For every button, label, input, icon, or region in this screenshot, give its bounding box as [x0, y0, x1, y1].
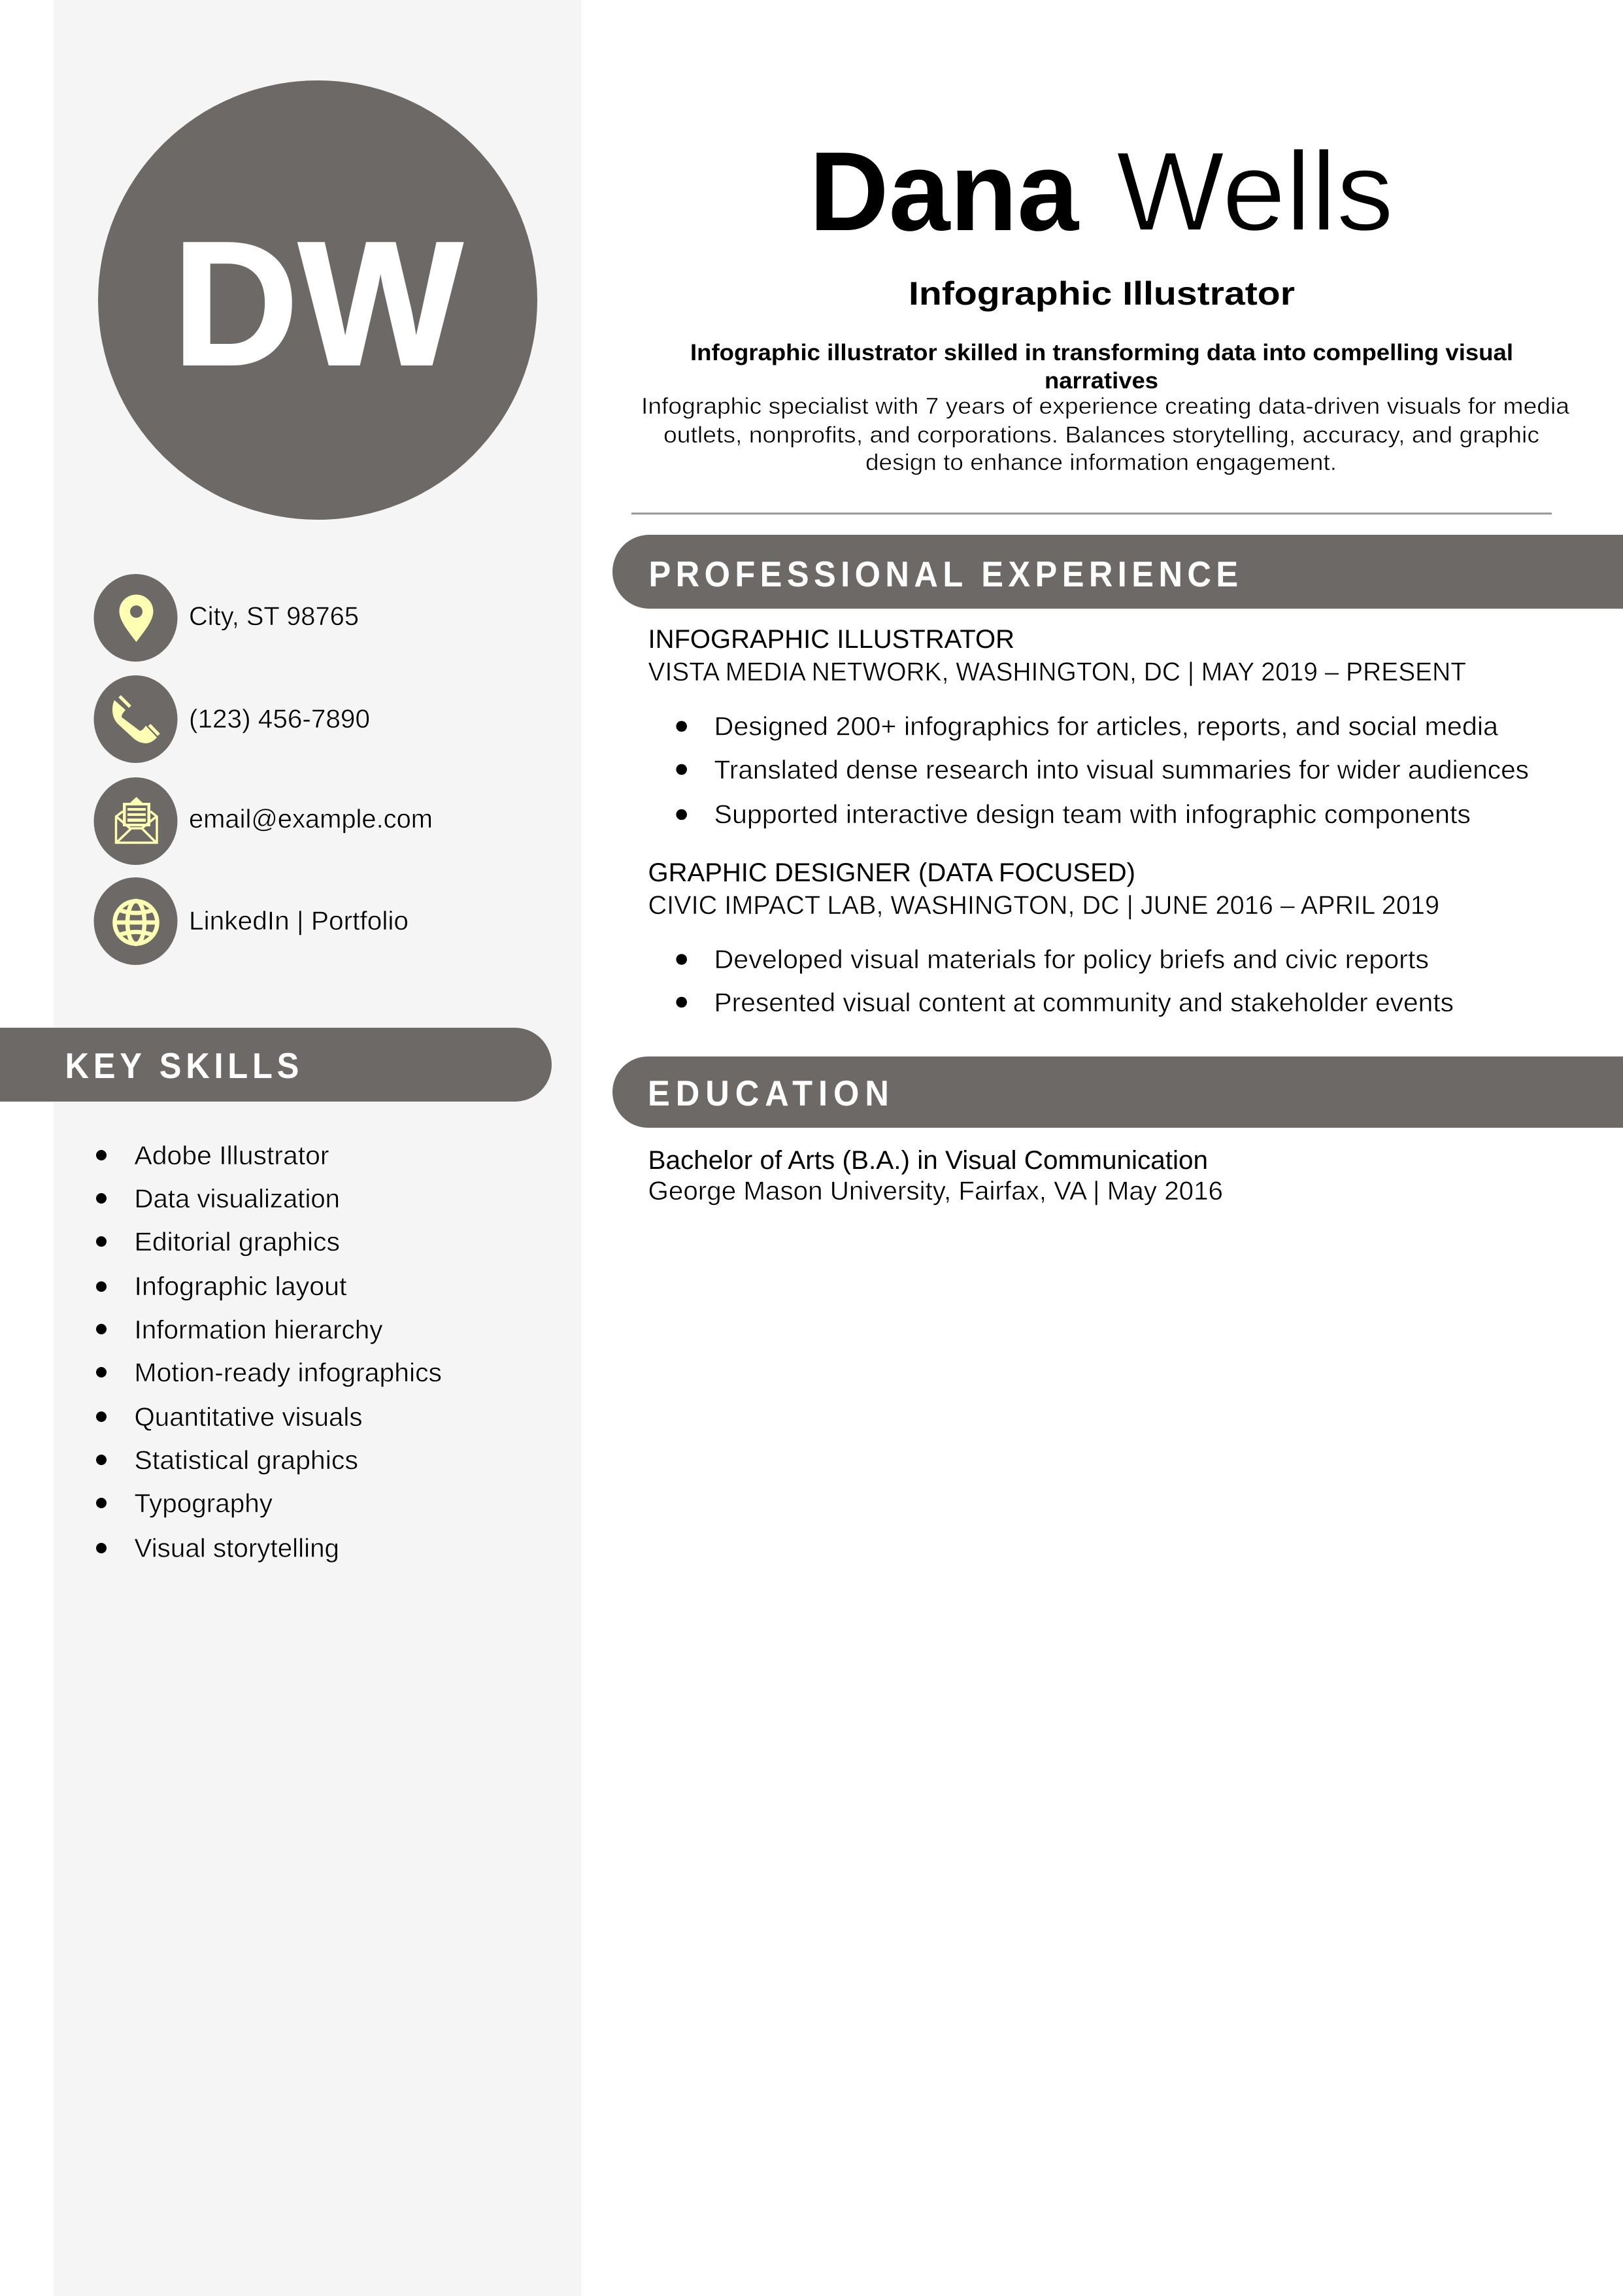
contact: links: LinkedIn | Portfolio	[189, 907, 409, 936]
skills list: Statistical graphics	[135, 1446, 358, 1475]
section header: professional experience: PROFESSIONAL EXPERIENCE	[648, 554, 1238, 594]
education entry: George Mason University, Fairfax, VA | May 2016	[648, 1177, 1223, 1206]
title: name: Dana	[809, 129, 1079, 254]
job title: Infographic Illustrator	[909, 275, 1295, 312]
education entry	[648, 1146, 1223, 1206]
contact: email	[94, 777, 433, 865]
skills list: Motion-ready infographics	[135, 1359, 442, 1387]
avatar circle with initials: DW	[173, 205, 464, 403]
job 1 heading: INFOGRAPHIC ILLUSTRATOR	[648, 625, 1014, 654]
skills list: Information hierarchy	[135, 1315, 383, 1344]
contact: links	[94, 877, 409, 965]
summary headline: Infographic illustrator skilled in transforming data into compelling visual	[690, 340, 1513, 365]
skills list: Visual storytelling	[135, 1534, 339, 1562]
job 2 bullets	[676, 945, 1454, 1017]
skills list	[96, 1141, 442, 1562]
job 1 bullets	[676, 713, 1529, 829]
section header: key skills	[0, 1028, 552, 1102]
job 1 bullets: Translated dense research into visual summaries for wider audiences	[714, 756, 1529, 785]
skills list: Adobe Illustrator	[135, 1141, 329, 1170]
icon: open envelope	[116, 797, 157, 843]
section header: key skills: KEY SKILLS	[65, 1046, 299, 1086]
job 1 heading	[648, 625, 1466, 686]
job 1 bullets: Designed 200+ infographics for articles, reports, and social media	[714, 713, 1499, 741]
icon: telephone handset	[112, 696, 159, 743]
panel: left sidebar	[54, 0, 582, 2296]
icon: map pin	[119, 595, 153, 642]
contact: phone: (123) 456-7890	[189, 705, 370, 734]
skills list: Data visualization	[135, 1185, 340, 1213]
job 2 heading: GRAPHIC DESIGNER (DATA FOCUSED)	[648, 858, 1135, 887]
contact: location: City, ST 98765	[189, 602, 359, 631]
job 1 heading: VISTA MEDIA NETWORK, WASHINGTON, DC | MAY 2019 – PRESENT	[648, 658, 1466, 686]
job 2 bullets: Developed visual materials for policy briefs and civic reports	[714, 945, 1429, 974]
section header: education: EDUCATION	[648, 1073, 889, 1113]
job 2 heading	[648, 858, 1439, 920]
job 2 bullets: Presented visual content at community and stakeholder events	[714, 988, 1454, 1017]
summary text: design to enhance information engagement.	[865, 450, 1337, 475]
section header: education	[612, 1056, 1623, 1128]
contact: location	[94, 574, 359, 662]
skills list: Quantitative visuals	[135, 1403, 362, 1432]
icon: globe	[115, 901, 157, 944]
title: name: Wells	[1116, 129, 1394, 254]
contact: email: email@example.com	[189, 805, 433, 834]
education entry: Bachelor of Arts (B.A.) in Visual Communication	[648, 1146, 1208, 1175]
skills list: Editorial graphics	[135, 1228, 340, 1257]
skills list: Infographic layout	[135, 1272, 346, 1301]
contact: phone	[94, 675, 370, 763]
section header: professional experience	[612, 535, 1623, 609]
summary headline	[690, 340, 1513, 394]
job 2 heading: CIVIC IMPACT LAB, WASHINGTON, DC | JUNE 2016 – APRIL 2019	[648, 891, 1439, 920]
summary text	[641, 394, 1570, 475]
summary text: Infographic specialist with 7 years of experience creating data-driven visuals for media	[641, 394, 1570, 419]
summary headline: narratives	[1045, 368, 1158, 394]
job 1 bullets: Supported interactive design team with infographic components	[714, 800, 1471, 829]
title: name	[809, 129, 1394, 254]
skills list: Typography	[135, 1489, 273, 1518]
avatar circle with initials	[98, 80, 537, 520]
summary text: outlets, nonprofits, and corporations. Balances storytelling, accuracy, and graphic	[663, 422, 1539, 448]
